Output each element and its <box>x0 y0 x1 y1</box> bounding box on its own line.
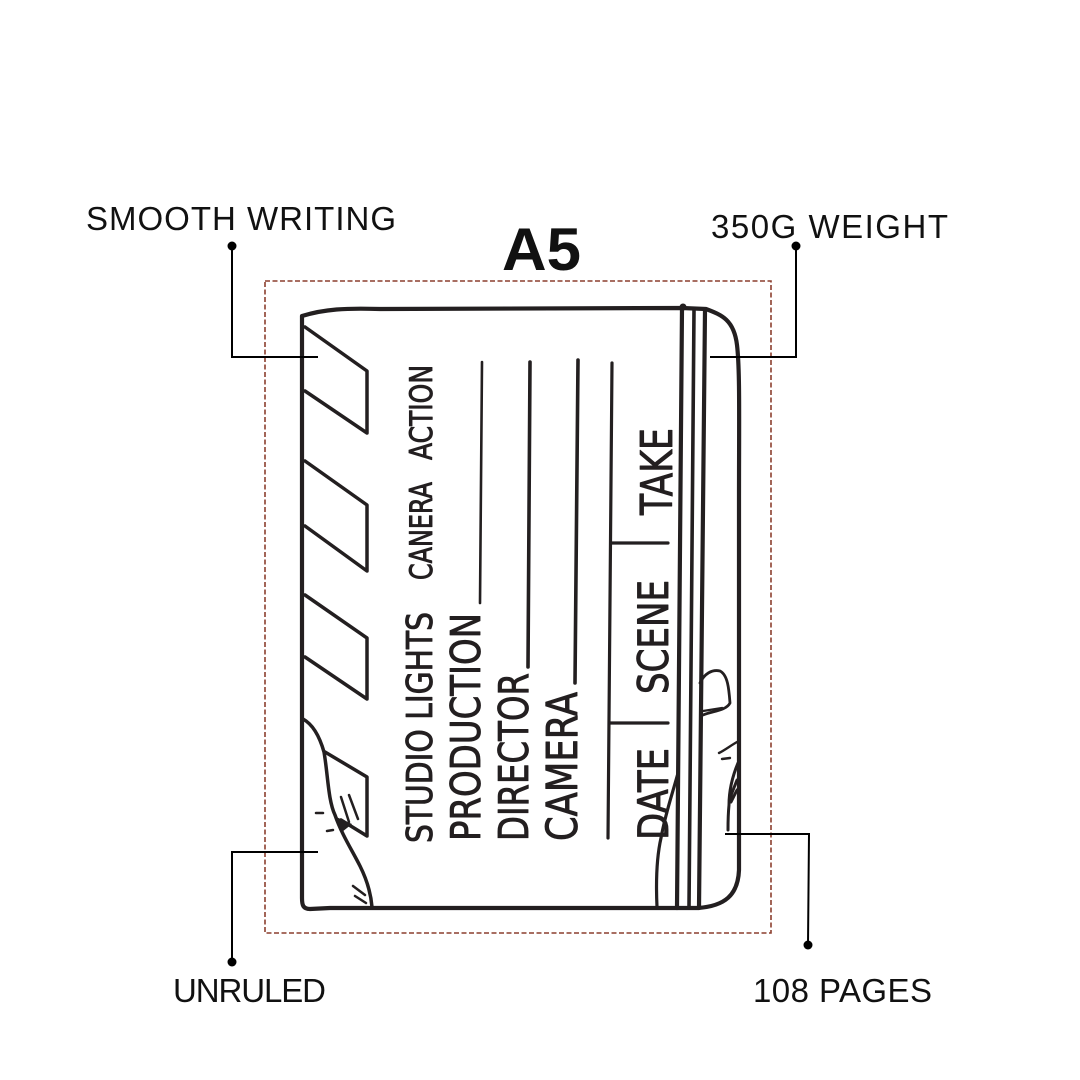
clapperboard text <box>400 365 683 843</box>
callout: smooth writing <box>86 200 396 357</box>
text: date: DATE <box>629 748 678 840</box>
callout: 350g weight: 350G WEIGHT <box>711 208 948 245</box>
size outline: dashed A5 boundary <box>265 281 771 933</box>
text: take: TAKE <box>632 428 683 516</box>
clapper stripe 1 <box>305 327 367 433</box>
text: camera: CAMERA <box>538 692 588 841</box>
text: director: DIRECTOR <box>490 673 538 841</box>
clapper stripe 3 <box>305 595 367 699</box>
callout: unruled: UNRULED <box>173 972 326 1009</box>
clapper stripe 4 <box>325 752 367 836</box>
page curl bottom left <box>303 719 372 907</box>
text: camera small: CANERA <box>404 482 440 580</box>
text: production: PRODUCTION <box>442 613 490 841</box>
notebook illustration: clapperboard cover <box>302 304 739 909</box>
callout: smooth writing: SMOOTH WRITING <box>86 200 396 237</box>
callout: 108 pages <box>725 834 932 1009</box>
elastic band <box>677 304 705 908</box>
heading: A5: A5 <box>502 216 581 283</box>
callout: 350g weight <box>710 208 948 357</box>
callout: 108 pages: 108 PAGES <box>753 972 932 1009</box>
text: action: ACTION <box>404 365 440 460</box>
callout: unruled <box>173 852 326 1009</box>
page curl bottom right <box>656 671 738 907</box>
form lines <box>480 360 668 838</box>
notebook outline <box>302 308 739 909</box>
text: studio lights: STUDIO LIGHTS <box>400 612 441 843</box>
clapper stripe 2 <box>305 461 367 571</box>
text: scene: SCENE <box>629 580 678 694</box>
